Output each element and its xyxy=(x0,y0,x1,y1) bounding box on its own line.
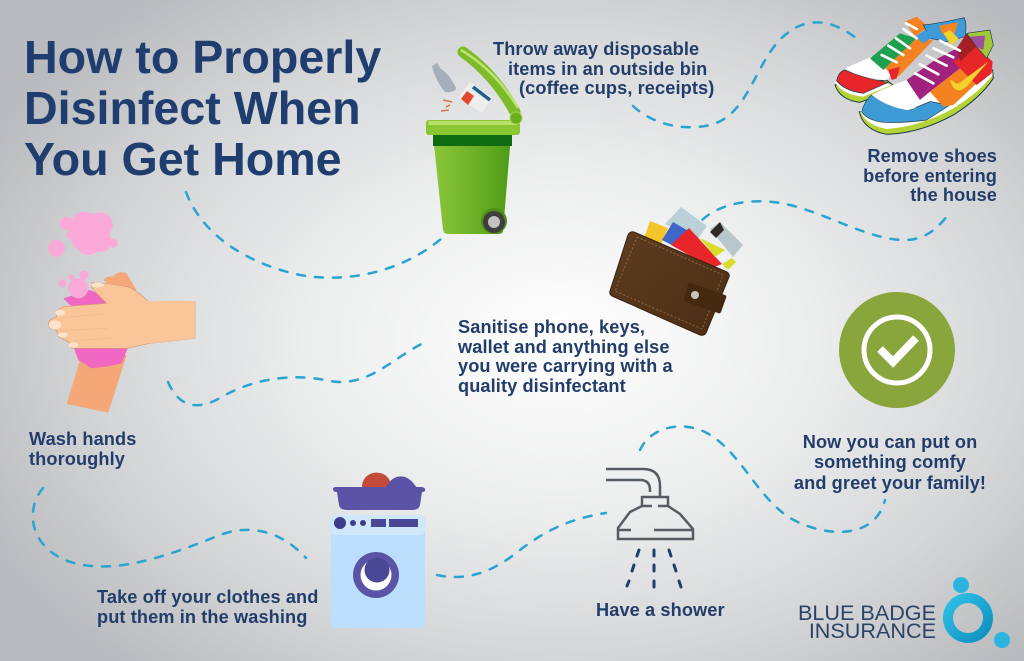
title: You Get Home xyxy=(24,133,342,185)
text: wash hands: thoroughly xyxy=(29,449,125,469)
text: sanitise: you were carrying with a xyxy=(458,356,673,376)
title: How to Properly xyxy=(24,31,381,83)
logo wordmark: INSURANCE xyxy=(809,618,936,643)
text: remove shoes: Remove shoes xyxy=(867,146,997,166)
text: clothes: put them in the washing xyxy=(97,607,307,627)
text: sanitise: quality disinfectant xyxy=(458,376,626,396)
logo wordmark xyxy=(798,600,936,643)
title xyxy=(24,31,381,185)
text: remove shoes xyxy=(863,146,997,205)
text: clothes xyxy=(97,587,318,627)
text: sanitise: wallet and anything else xyxy=(458,337,670,357)
text: remove shoes: before entering xyxy=(863,166,997,186)
text: comfy: and greet your family! xyxy=(794,473,986,493)
text: throw away: Throw away disposable xyxy=(493,39,699,59)
logo mark xyxy=(943,577,1010,648)
text: sanitise xyxy=(458,317,673,396)
text: comfy: something comfy xyxy=(814,452,966,472)
text: comfy: Now you can put on xyxy=(803,432,977,452)
text: sanitise: Sanitise phone, keys, xyxy=(458,317,645,337)
logo wordmark: BLUE BADGE xyxy=(798,600,936,625)
text: shower: Have a shower xyxy=(596,600,725,620)
text: remove shoes: the house xyxy=(910,185,997,205)
text: throw away: items in an outside bin xyxy=(508,59,707,79)
title: Disinfect When xyxy=(24,82,361,134)
text: throw away xyxy=(493,39,714,98)
text: throw away: (coffee cups, receipts) xyxy=(519,78,714,98)
text: wash hands xyxy=(29,429,136,469)
text: clothes: Take off your clothes and xyxy=(97,587,318,607)
logo xyxy=(798,577,1010,648)
text: wash hands: Wash hands xyxy=(29,429,136,449)
text: comfy xyxy=(794,432,986,493)
